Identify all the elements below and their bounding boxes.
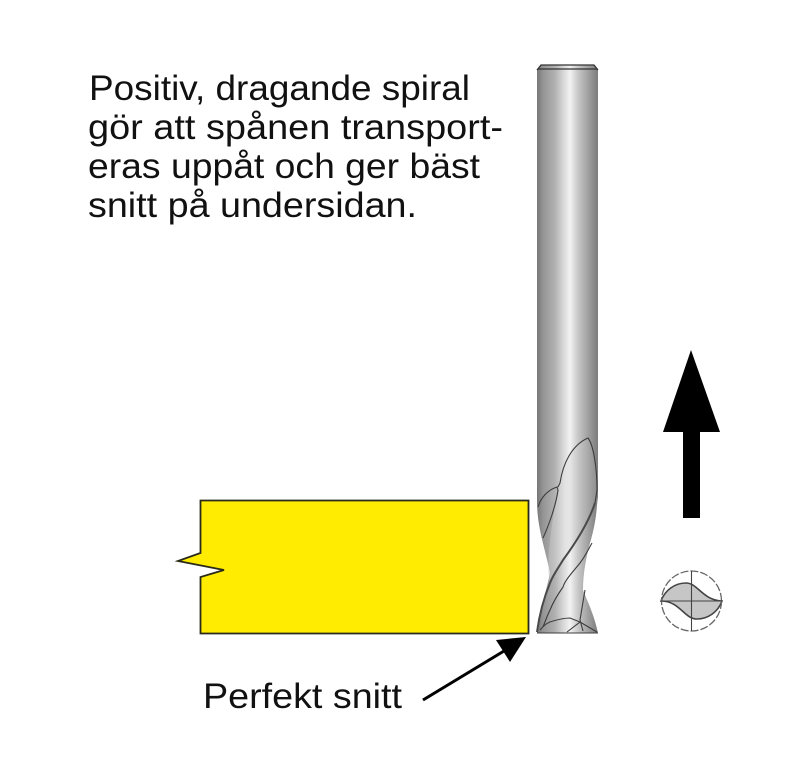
large flute face: [548, 438, 597, 583]
shank top edge: [537, 65, 598, 70]
label: Perfekt snitt: Perfekt snitt: [203, 677, 402, 716]
yellow workpiece: [178, 500, 528, 634]
cross hairs: [661, 571, 722, 631]
up arrow: [663, 350, 720, 518]
dashed outer circle: [662, 571, 722, 631]
bit shank and cutting body: [537, 65, 598, 633]
description text: [88, 69, 503, 225]
description text: eras uppåt och ger bäst: [88, 147, 480, 186]
end-view icon of bit cross section: [661, 571, 722, 631]
cross section fill: [661, 583, 722, 619]
description text: snitt på undersidan.: [88, 186, 417, 225]
description text: gör att spånen transport-: [88, 108, 503, 147]
router bit: [537, 65, 598, 633]
flute lines: [537, 438, 598, 633]
description text: Positiv, dragande spiral: [89, 69, 470, 108]
pointer arrow: [423, 637, 526, 700]
